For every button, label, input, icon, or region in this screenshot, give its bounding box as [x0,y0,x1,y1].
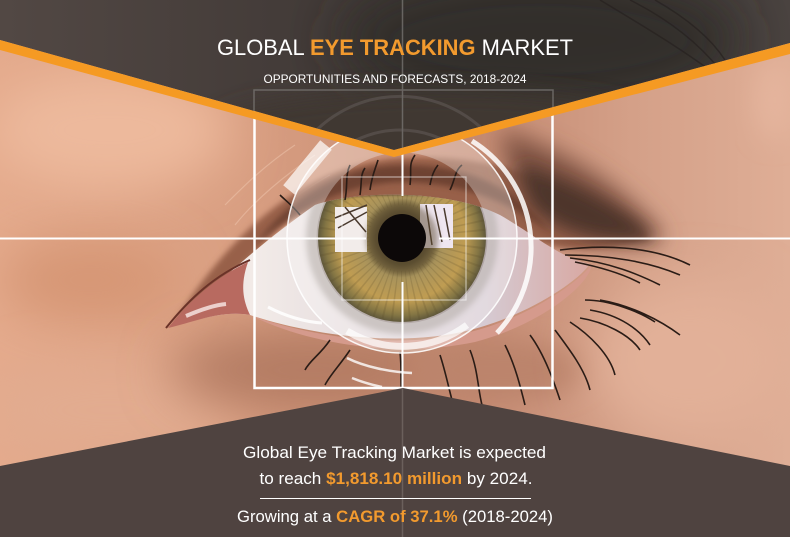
eyelid wrinkles [225,145,340,250]
inner square [342,177,466,300]
lower lid rim [250,264,592,349]
eyelid shadow [175,157,650,322]
CAGR text: Growing at a CAGR of 37.1% (2018-2024) [237,507,553,526]
photo: close-up eye background [0,40,790,466]
thin ring [287,123,517,353]
dark chevron [0,388,790,537]
subtitle: OPPORTUNITIES AND FORECASTS, 2018-2024 [264,72,527,86]
outer square [254,90,552,388]
caruncle [168,262,250,328]
panel: bottom dark banner [0,388,790,537]
orange band [0,40,790,157]
faint frame and rings [254,0,553,150]
market size text: Global Eye Tracking Market is expected [243,443,546,462]
dark chevron [0,0,790,150]
crosshair [0,0,790,388]
thick arcs [472,141,531,333]
tracking overlay graphic [0,0,790,388]
lashes [280,155,690,405]
panel: top dark banner [0,0,790,170]
eye sclera [172,195,590,339]
title: GLOBAL EYE TRACKING MARKET [217,35,573,60]
translucent ring [302,138,502,338]
iris and pupil [304,194,500,336]
market value text: to reach $1,818.10 million by 2024. [260,469,532,488]
brow shading [239,0,744,150]
